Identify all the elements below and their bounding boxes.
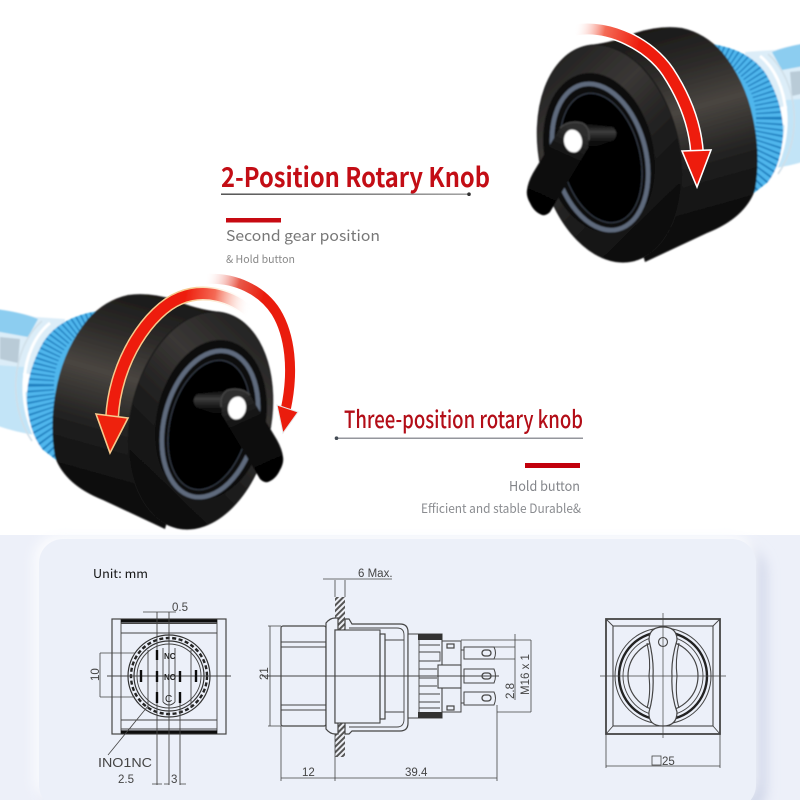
diagram: side view: 39.4 bbox=[405, 767, 428, 779]
knob: 2-position rotary knob photo bbox=[518, 27, 800, 276]
title: three-position rotary knob: Three-position rotary knob bbox=[344, 400, 583, 435]
diagram: terminal end view: NO bbox=[164, 673, 176, 682]
arrow: left red arrow on lower knob bbox=[96, 294, 250, 453]
diagram: terminal end view: 0.5 bbox=[172, 602, 188, 614]
diagram: terminal end view: 3 bbox=[171, 774, 177, 786]
diagram: terminal end view: INO1NC bbox=[98, 756, 152, 770]
diagram: terminal end view: 10 bbox=[90, 668, 102, 681]
text: second gear position: Second gear position bbox=[226, 225, 380, 246]
text: hold button note: & Hold button bbox=[226, 252, 295, 267]
diagram: terminal end view: C bbox=[165, 694, 172, 705]
text: hold button: Hold button bbox=[509, 475, 580, 495]
red accent bar bbox=[226, 218, 281, 222]
diagram: side view: M16 x 1 bbox=[520, 654, 532, 695]
diagram: front view: 25 bbox=[662, 756, 675, 768]
text: unit: Unit: mm bbox=[93, 565, 148, 582]
diagram: terminal end view bbox=[90, 602, 231, 786]
arrow: right red arrow on lower knob bbox=[205, 279, 298, 433]
diagram: side view: 12 bbox=[302, 767, 315, 779]
title: 2-position rotary knob: 2-Position Rotary Knob bbox=[221, 156, 490, 195]
diagram: side view: 2.8 bbox=[505, 683, 517, 699]
red accent bar bbox=[525, 463, 580, 468]
knob: three-position rotary knob photo bbox=[0, 294, 292, 543]
text: efficient and stable: Efficient and stable Durable& bbox=[421, 498, 581, 517]
diagram: terminal end view: NC bbox=[164, 652, 176, 661]
title underline with dot bbox=[335, 436, 583, 440]
diagram: terminal end view: 2.5 bbox=[118, 774, 134, 786]
arrow: clockwise red arrow on top knob bbox=[575, 29, 711, 187]
panel: dimensions backdrop bbox=[0, 534, 800, 800]
diagram: side view: 21 bbox=[259, 667, 271, 680]
diagram: side view bbox=[259, 568, 532, 781]
diagram: side view: 6 Max. bbox=[358, 568, 393, 580]
diagram: front view bbox=[600, 613, 726, 768]
title underline with dot bbox=[221, 192, 471, 196]
